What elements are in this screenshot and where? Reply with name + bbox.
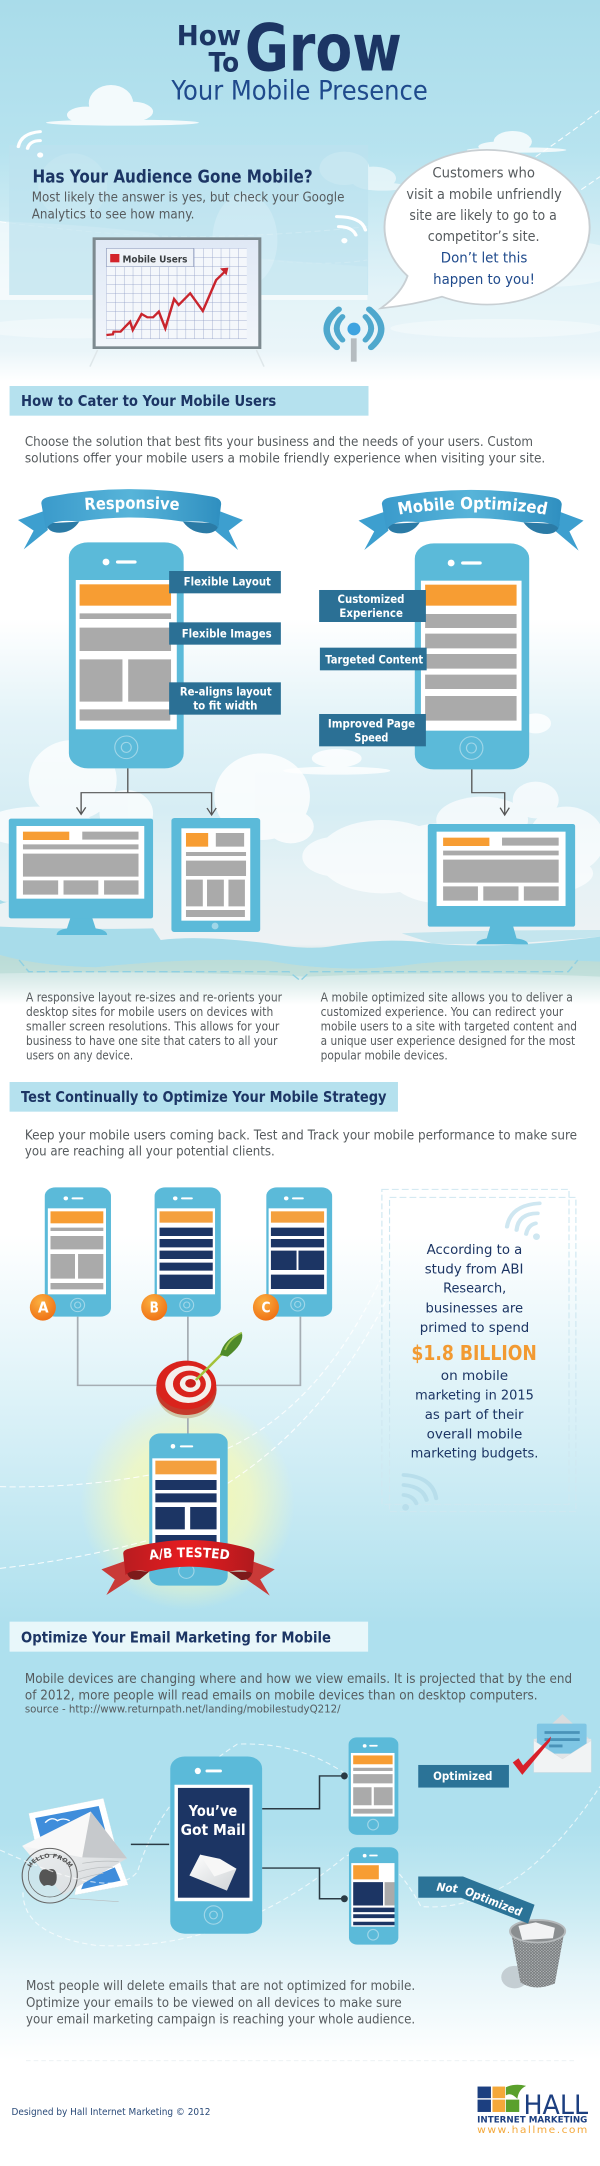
speech bubble: competitor’s site. <box>428 228 540 245</box>
label: targeted content: Targeted Content <box>325 653 423 666</box>
email closing text: Most people will delete emails that are not optimized for mobile. <box>26 1979 415 1994</box>
icon: faded wifi bottom <box>402 1475 436 1511</box>
phone: responsive <box>69 542 184 768</box>
panel body text: Most likely the answer is yes, but check your Google <box>32 191 344 205</box>
callout: ABI research: businesses are <box>426 1301 523 1316</box>
phone: optimized result <box>349 1737 398 1835</box>
logo: hall internet marketing: INTERNET MARKETING <box>477 2116 587 2125</box>
email intro text: source - http://www.returnpath.net/landing/mobilestudyQ212/ <box>25 1703 341 1716</box>
text: responsive description: users on any device. <box>26 1049 133 1063</box>
hero clouds <box>0 85 600 338</box>
speech bubble: visit a mobile unfriendly <box>406 186 562 203</box>
phone: not optimized result <box>349 1847 398 1945</box>
chart: mobile users <box>90 239 264 367</box>
section heading: email <box>10 1622 368 1652</box>
connectors <box>78 1317 300 1437</box>
speech bubble: Customers who <box>432 164 535 181</box>
text: responsive description: smaller screen resolutions. This allows for your <box>26 1020 280 1034</box>
callout: ABI research: study from ABI <box>425 1262 523 1277</box>
phone C: C <box>261 1298 271 1316</box>
ribbon: A/B tested <box>102 1540 275 1596</box>
panel: responsive <box>8 489 281 935</box>
logo: hall internet marketing: www.hallme.com <box>477 2125 587 2136</box>
comparison clouds <box>0 713 600 903</box>
callout: ABI research: marketing in 2015 <box>415 1389 534 1403</box>
ribbon: responsive: Responsive <box>85 496 179 512</box>
section heading: test continually <box>10 1082 398 1112</box>
arrows: responsive to devices <box>77 768 216 815</box>
phone B: B <box>150 1298 159 1316</box>
phone: winner <box>149 1433 228 1586</box>
icon: target with dart <box>156 1333 242 1418</box>
phone A: A <box>38 1298 49 1316</box>
phone B <box>141 1187 221 1321</box>
title: How <box>177 20 241 52</box>
text: responsive description: business to have one site that caters to all your <box>26 1035 278 1049</box>
callout: ABI research: overall mobile <box>427 1427 522 1442</box>
title: Your Mobile Presence <box>171 74 428 106</box>
label: customized experience: Customized <box>337 593 404 606</box>
section heading: how to cater: How to Cater to Your Mobile Users <box>21 392 276 410</box>
text: optimized description: popular mobile devices. <box>321 1049 448 1063</box>
icon: trash can <box>501 1920 565 1988</box>
section heading: how to cater <box>10 386 368 416</box>
label: re-aligns layout: to fit width <box>193 699 258 712</box>
callout: ABI research: According to a <box>427 1243 522 1258</box>
section heading: test continually: Test Continually to Optimize Your Mobile Strategy <box>21 1088 387 1106</box>
label: customized experience <box>319 590 426 622</box>
ribbon: mobile optimized <box>358 490 584 550</box>
label: improved page speed: Speed <box>354 731 388 744</box>
ribbon: responsive <box>18 489 243 550</box>
text: optimized description <box>321 991 577 1063</box>
panel body text: Analytics to see how many. <box>32 207 194 222</box>
speech bubble <box>381 150 590 308</box>
callout: ABI research: as part of their <box>425 1408 524 1423</box>
title: Grow <box>245 10 402 86</box>
dashed flight paths <box>0 110 600 263</box>
connectors <box>131 1773 347 1902</box>
label: optimized <box>418 1765 509 1788</box>
monitor: responsive <box>9 819 153 935</box>
icon: antenna <box>327 309 381 362</box>
phone: you've got mail: You’ve <box>188 1801 237 1820</box>
label: customized experience: Experience <box>339 607 403 620</box>
panel: mobile optimized <box>319 490 584 944</box>
callout: ABI research: marketing budgets. <box>411 1446 538 1461</box>
panel heading: Has Your Audience Gone Mobile? <box>33 168 313 187</box>
email closing text: your email marketing campaign is reaching your whole audience. <box>26 2012 415 2028</box>
icon: envelope <box>189 1855 236 1891</box>
speech bubble: Don’t let this <box>441 249 527 266</box>
logo: hall internet marketing <box>26 2061 588 2136</box>
email closing text <box>26 1979 415 2028</box>
section heading: email: Optimize Your Email Marketing for Mobile <box>21 1629 331 1646</box>
label: flexible images: Flexible Images <box>182 627 272 640</box>
label: improved page speed: Improved Page <box>328 717 415 730</box>
label: re-aligns layout: Re-aligns layout <box>180 685 272 698</box>
title: To <box>209 47 239 78</box>
icon: stamped letter <box>22 1798 128 1904</box>
callout: ABI research: Research, <box>443 1282 506 1296</box>
icon: faded wifi top <box>507 1203 540 1240</box>
phone A <box>30 1187 111 1321</box>
A/B test diagram <box>0 1187 386 1603</box>
label: improved page speed <box>319 714 426 746</box>
label: flexible images <box>169 622 281 645</box>
icon: wifi top left <box>18 132 43 158</box>
callout: ABI research: on mobile <box>441 1369 508 1384</box>
footer credit: Designed by Hall Internet Marketing © 2012 <box>11 2106 210 2118</box>
panel: has your audience gone mobile <box>9 145 368 295</box>
title <box>171 10 428 106</box>
ribbon: A/B tested: A/B TESTED <box>150 1547 230 1560</box>
icon: stamped letter: HELLO FROM <box>27 1854 73 1868</box>
label: optimized: Optimized <box>433 1770 492 1783</box>
intro text <box>25 435 545 466</box>
tablet: responsive <box>171 818 260 932</box>
test intro text <box>25 1128 577 1159</box>
chart: mobile users: Mobile Users <box>122 253 187 265</box>
email closing text: Optimize your emails to be viewed on all devices to make sure <box>26 1995 402 2011</box>
icon: open envelope <box>534 1714 591 1772</box>
logo: hall internet marketing: HALL <box>523 2089 588 2121</box>
callout: ABI research: primed to spend <box>420 1321 529 1336</box>
monitor: mobile optimized <box>428 824 575 944</box>
text: responsive description: desktop sites for mobile users on devices with <box>26 1006 273 1020</box>
speech bubble: site are likely to go to a <box>409 207 557 224</box>
label: targeted content <box>320 648 427 670</box>
speech bubble: happen to you! <box>433 271 535 288</box>
panel body text <box>32 191 344 222</box>
phone: mobile optimized <box>415 543 529 769</box>
ribbon: mobile optimized: Mobile Optimized <box>398 496 548 514</box>
email diagram <box>0 1714 600 1988</box>
phone: you've got mail <box>170 1756 262 1934</box>
icon: wifi right of panel <box>337 217 365 243</box>
arrow: optimized to monitor <box>472 769 509 815</box>
label: not optimized <box>418 1877 535 1923</box>
phone: you've got mail: Got Mail <box>181 1820 246 1839</box>
divider cloud band <box>0 900 600 977</box>
callout: ABI research: $1.8 BILLION <box>411 1342 537 1366</box>
label: flexible layout <box>169 571 281 593</box>
dashed bracket <box>19 960 578 981</box>
text: responsive description <box>26 991 283 1063</box>
text: responsive description: A responsive layout re-sizes and re-orients your <box>26 991 283 1005</box>
label: re-aligns layout <box>169 682 281 715</box>
callout: ABI research <box>382 1189 576 1512</box>
icon: red check <box>513 1736 551 1775</box>
label: not optimized: Not <box>436 1880 459 1896</box>
email intro text <box>25 1672 572 1716</box>
test intro text: you are reaching all your potential clients. <box>25 1144 275 1159</box>
label: not optimized: Optimized <box>463 1884 525 1919</box>
label: flexible layout: Flexible Layout <box>184 575 271 588</box>
phone C <box>253 1187 332 1321</box>
